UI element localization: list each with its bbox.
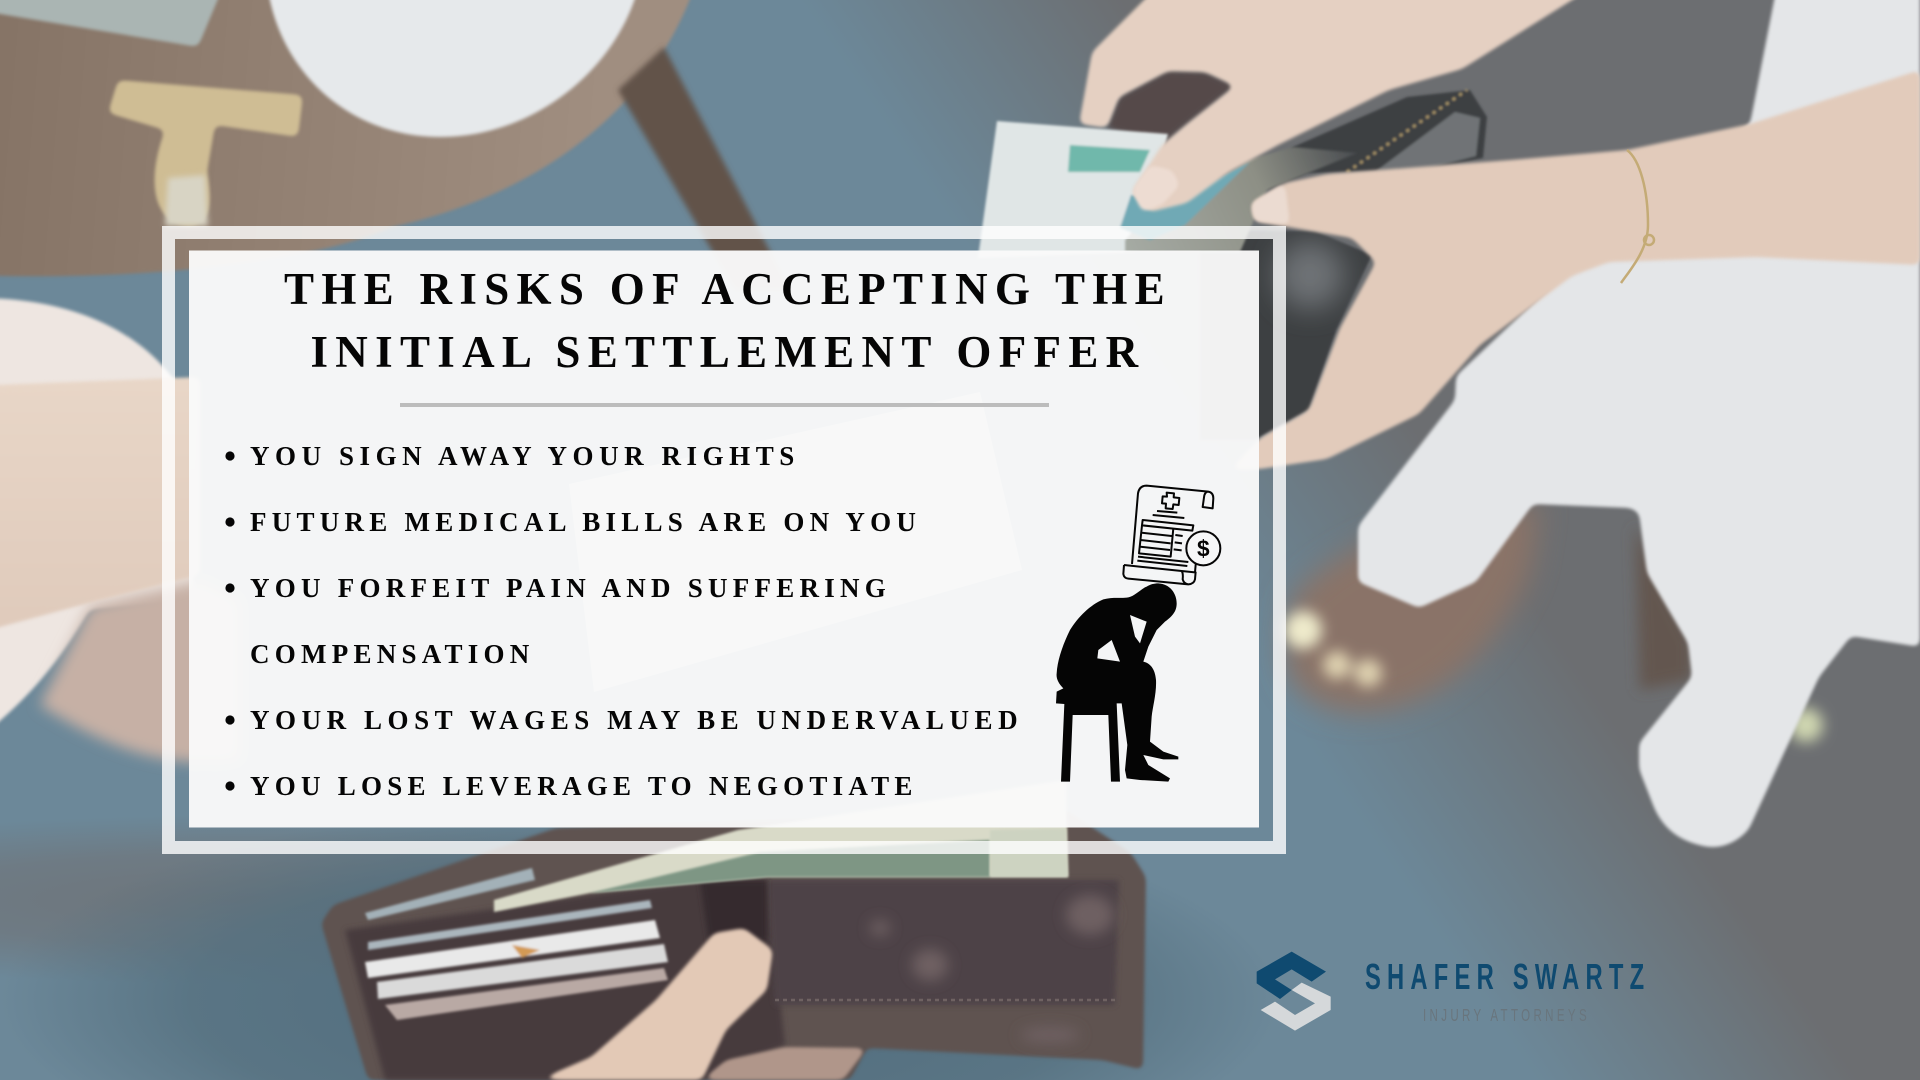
thumb [538,928,773,1080]
banknote [978,121,1357,258]
outer translucent frame [168,232,1280,848]
title: INITIAL SETTLEMENT OFFER [310,327,1146,377]
bullet list: YOU FORFEIT PAIN AND SUFFERING [250,573,891,603]
lower thumbnail [1251,183,1290,225]
logo mark [1257,952,1331,1031]
logo: Shafer Swartz Injury Attorneys [1257,952,1644,1031]
bullet list: COMPENSATION [250,639,535,669]
table leg [618,47,790,290]
shadowed leg [40,580,240,763]
cards [365,868,668,1020]
thumbnail [1132,165,1180,212]
foot shadow [1284,504,1541,712]
logo tagline: INJURY ATTORNEYS [1423,1007,1587,1026]
upper hand [1079,0,1620,212]
table [0,0,700,276]
bullet list: YOUR LOST WAGES MAY BE UNDERVALUED [250,705,1023,735]
logo wordmark: SHAFER SWARTZ [1365,957,1644,997]
title [284,264,1172,377]
bracelet [1621,150,1654,283]
icon: seated silhouette [1056,583,1178,782]
bullet list [225,441,1023,801]
panel: risks list [189,250,1259,828]
title: THE RISKS OF ACCEPTING THE [284,264,1172,314]
bullet list: FUTURE MEDICAL BILLS ARE ON YOU [250,507,921,537]
brown wallet [321,780,1146,1080]
gold clip [108,80,303,226]
black wallet in upper hand [1200,90,1487,440]
book [0,0,230,47]
plate [266,0,642,137]
title divider [400,403,1049,407]
lower hand and arm [1230,70,1920,470]
icon: distressed person with medical bill: $ [1197,536,1210,562]
icon: distressed person with medical bill [1056,486,1220,782]
faint banknote behind the panel [569,392,1022,692]
bullet list: YOU LOSE LEVERAGE TO NEGOTIATE [250,771,918,801]
icon: medical bill [1123,486,1220,584]
finger gap [1107,71,1235,145]
bullet list: YOU SIGN AWAY YOUR RIGHTS [250,441,800,471]
white dress [1358,0,1920,847]
cash [494,780,1068,912]
knee [0,298,195,745]
gold toenail highlights [1284,611,1823,742]
forearm [0,377,200,635]
